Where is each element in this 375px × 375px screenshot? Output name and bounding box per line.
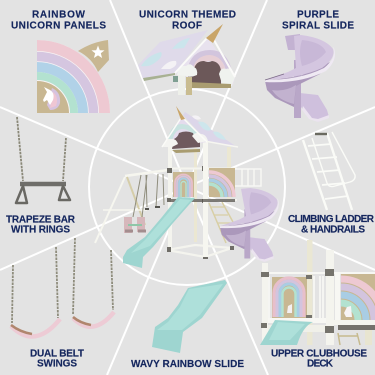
playset slide <box>123 197 195 268</box>
heading: unicorn themed roof <box>139 10 236 32</box>
heading: dual belt swings: SWINGS <box>37 359 77 370</box>
heading: climbing ladder and handrails: CLIMBING LADDER <box>288 214 375 225</box>
icon: trapeze bar and rings <box>16 117 70 203</box>
icon: ladder <box>303 132 355 210</box>
icon: rainbow panel <box>37 40 110 113</box>
heading: upper clubhouse deck: UPPER CLUBHOUSE <box>271 349 367 360</box>
panel: purple spiral slide <box>265 10 354 122</box>
icon: wavy slide <box>152 280 227 353</box>
heading: dual belt swings <box>30 349 84 370</box>
heading: purple spiral slide: SPIRAL SLIDE <box>282 20 354 32</box>
heading: upper clubhouse deck: DECK <box>307 359 334 370</box>
heading: rainbow unicorn panels: UNICORN PANELS <box>11 20 106 32</box>
icon: roof <box>138 24 235 95</box>
clubhouse frame <box>167 147 261 259</box>
heading: trapeze bar with rings <box>6 215 76 236</box>
panel: rainbow unicorn panels <box>11 10 110 113</box>
roof <box>162 106 238 153</box>
heading: unicorn themed roof: UNICORN THEMED <box>139 10 236 20</box>
panel: climbing ladder and handrails <box>288 132 375 236</box>
icon: clubhouse deck <box>260 240 375 345</box>
heading: wavy rainbow slide: WAVY RAINBOW SLIDE <box>131 359 244 370</box>
heading: dual belt swings: DUAL BELT <box>30 349 84 360</box>
heading: upper clubhouse deck <box>271 349 367 370</box>
panel: upper clubhouse deck <box>260 240 375 370</box>
panel: dual belt swings <box>11 238 114 370</box>
icon: spiral slide <box>265 34 335 122</box>
heading: purple spiral slide <box>282 10 354 32</box>
panel: wavy rainbow slide <box>131 280 244 370</box>
swing frame <box>95 170 168 243</box>
heading: trapeze bar with rings: WITH RINGS <box>11 225 70 236</box>
heading: climbing ladder and handrails: & HANDRAILS <box>301 225 365 236</box>
heading: rainbow unicorn panels: RAINBOW <box>32 10 86 20</box>
heading: rainbow unicorn panels <box>11 10 106 32</box>
heading: climbing ladder and handrails <box>288 214 375 236</box>
heading: unicorn themed roof: ROOF <box>172 20 202 32</box>
heading: trapeze bar with rings: TRAPEZE BAR <box>6 215 76 226</box>
playset spiral slide <box>220 188 279 262</box>
heading: purple spiral slide: PURPLE <box>297 10 339 20</box>
center post and ladder <box>171 142 235 257</box>
panel: unicorn themed roof <box>138 10 236 95</box>
center: full playset <box>95 106 279 268</box>
rainbow panels on clubhouse <box>173 168 235 197</box>
panel: trapeze bar with rings <box>6 117 76 236</box>
icon: belt swings <box>11 238 114 336</box>
